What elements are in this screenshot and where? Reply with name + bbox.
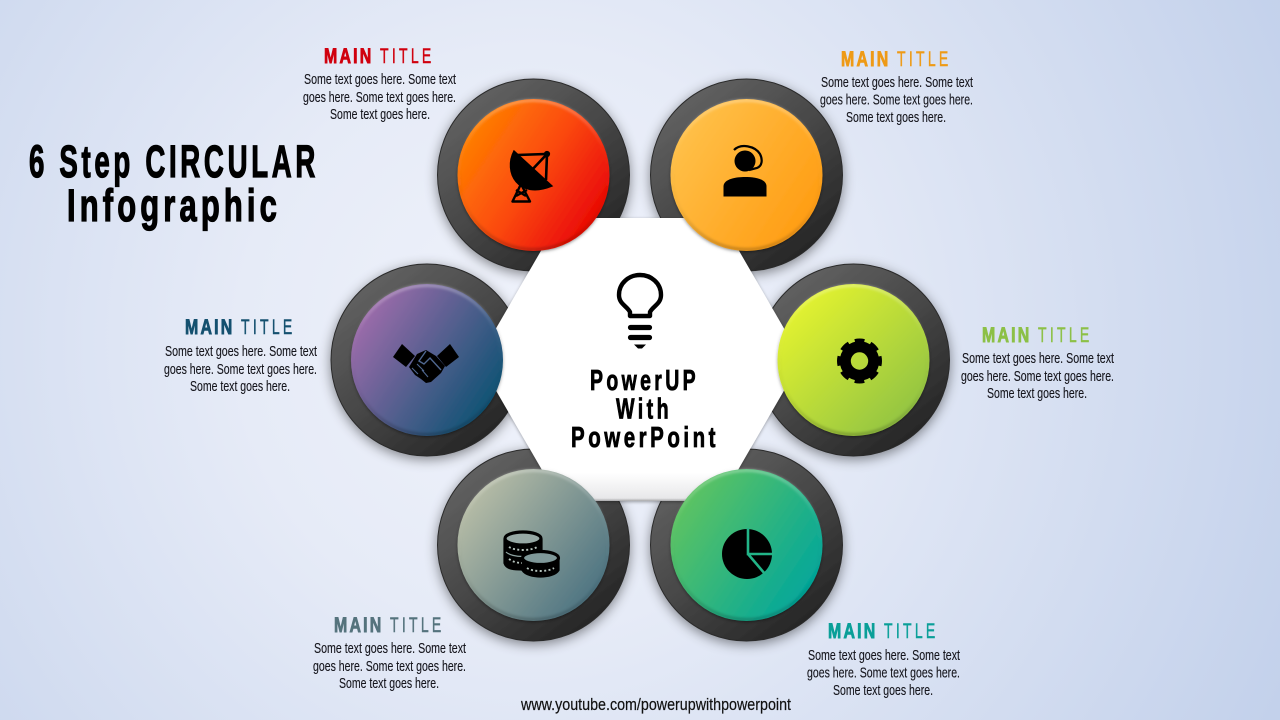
text block: lime step: Some text goes here. Some text bbox=[962, 351, 1114, 367]
icon: satellite dish bbox=[510, 151, 552, 202]
button: grey bbox=[458, 469, 610, 621]
text block: lime step: goes here. Some text goes here. bbox=[961, 369, 1114, 385]
text block: blue step: MAIN bbox=[185, 315, 234, 339]
text block: grey step: goes here. Some text goes here. bbox=[313, 659, 466, 675]
text block: blue step: goes here. Some text goes here. bbox=[164, 362, 317, 378]
text block: blue step bbox=[164, 315, 317, 395]
central hexagon bbox=[478, 218, 802, 501]
center label: With bbox=[616, 394, 672, 426]
text block: grey step bbox=[313, 613, 466, 692]
button: teal bbox=[670, 469, 822, 621]
main heading: Infographic bbox=[67, 180, 281, 231]
button: amber bbox=[670, 99, 822, 251]
icon: light bulb bbox=[619, 275, 661, 348]
text block: red step: Some text goes here. Some text bbox=[304, 72, 456, 88]
center label: PowerPoint bbox=[571, 422, 719, 454]
main heading bbox=[29, 136, 319, 231]
center label: PowerUP bbox=[590, 365, 699, 397]
text block: grey step: Some text goes here. Some text bbox=[314, 641, 466, 657]
text block: grey step: MAIN bbox=[334, 613, 384, 637]
text block: teal step: goes here. Some text goes here. bbox=[807, 666, 960, 682]
text block: teal step: TITLE bbox=[884, 619, 938, 643]
main heading: 6 Step CIRCULAR bbox=[29, 136, 319, 187]
text block: lime step bbox=[961, 323, 1114, 402]
text block: blue step: TITLE bbox=[241, 315, 296, 339]
icon: pie chart bbox=[722, 528, 774, 579]
outer rings bbox=[331, 79, 950, 641]
text block: red step: MAIN bbox=[324, 44, 374, 68]
text block: grey step: Some text goes here. bbox=[339, 676, 439, 692]
text block: teal step: Some text goes here. Some text bbox=[808, 648, 960, 664]
text block: blue step: Some text goes here. Some text bbox=[165, 344, 317, 360]
text block: grey step: TITLE bbox=[390, 613, 444, 637]
text block: amber step: Some text goes here. bbox=[846, 110, 946, 126]
text block: lime step: Some text goes here. bbox=[987, 386, 1087, 402]
text block: blue step: Some text goes here. bbox=[190, 379, 290, 395]
icon: coins bbox=[505, 532, 558, 576]
text block: teal step bbox=[807, 619, 960, 699]
text block: amber step: Some text goes here. Some text bbox=[821, 75, 973, 91]
button: purple blue bbox=[351, 284, 503, 436]
text block: amber step: TITLE bbox=[897, 47, 952, 71]
text block: amber step: MAIN bbox=[841, 47, 890, 71]
text block: lime step: TITLE bbox=[1038, 323, 1092, 347]
button: lime bbox=[778, 284, 930, 436]
footer url: www.youtube.com/powerupwithpowerpoint bbox=[520, 695, 791, 714]
text block: red step bbox=[303, 44, 456, 123]
button: red bbox=[458, 99, 610, 251]
text block: red step: TITLE bbox=[380, 44, 434, 68]
center label bbox=[571, 365, 719, 454]
icon: gear bbox=[840, 341, 880, 381]
text block: teal step: MAIN bbox=[828, 619, 878, 643]
text block: lime step: MAIN bbox=[982, 323, 1032, 347]
text block: amber step: goes here. Some text goes here. bbox=[820, 92, 973, 108]
text block: teal step: Some text goes here. bbox=[833, 683, 933, 699]
text block: amber step bbox=[820, 47, 973, 126]
text block: red step: Some text goes here. bbox=[330, 107, 430, 123]
text block: red step: goes here. Some text goes here. bbox=[303, 90, 456, 106]
icon: handshake bbox=[393, 344, 459, 383]
icon: support agent bbox=[724, 146, 766, 196]
